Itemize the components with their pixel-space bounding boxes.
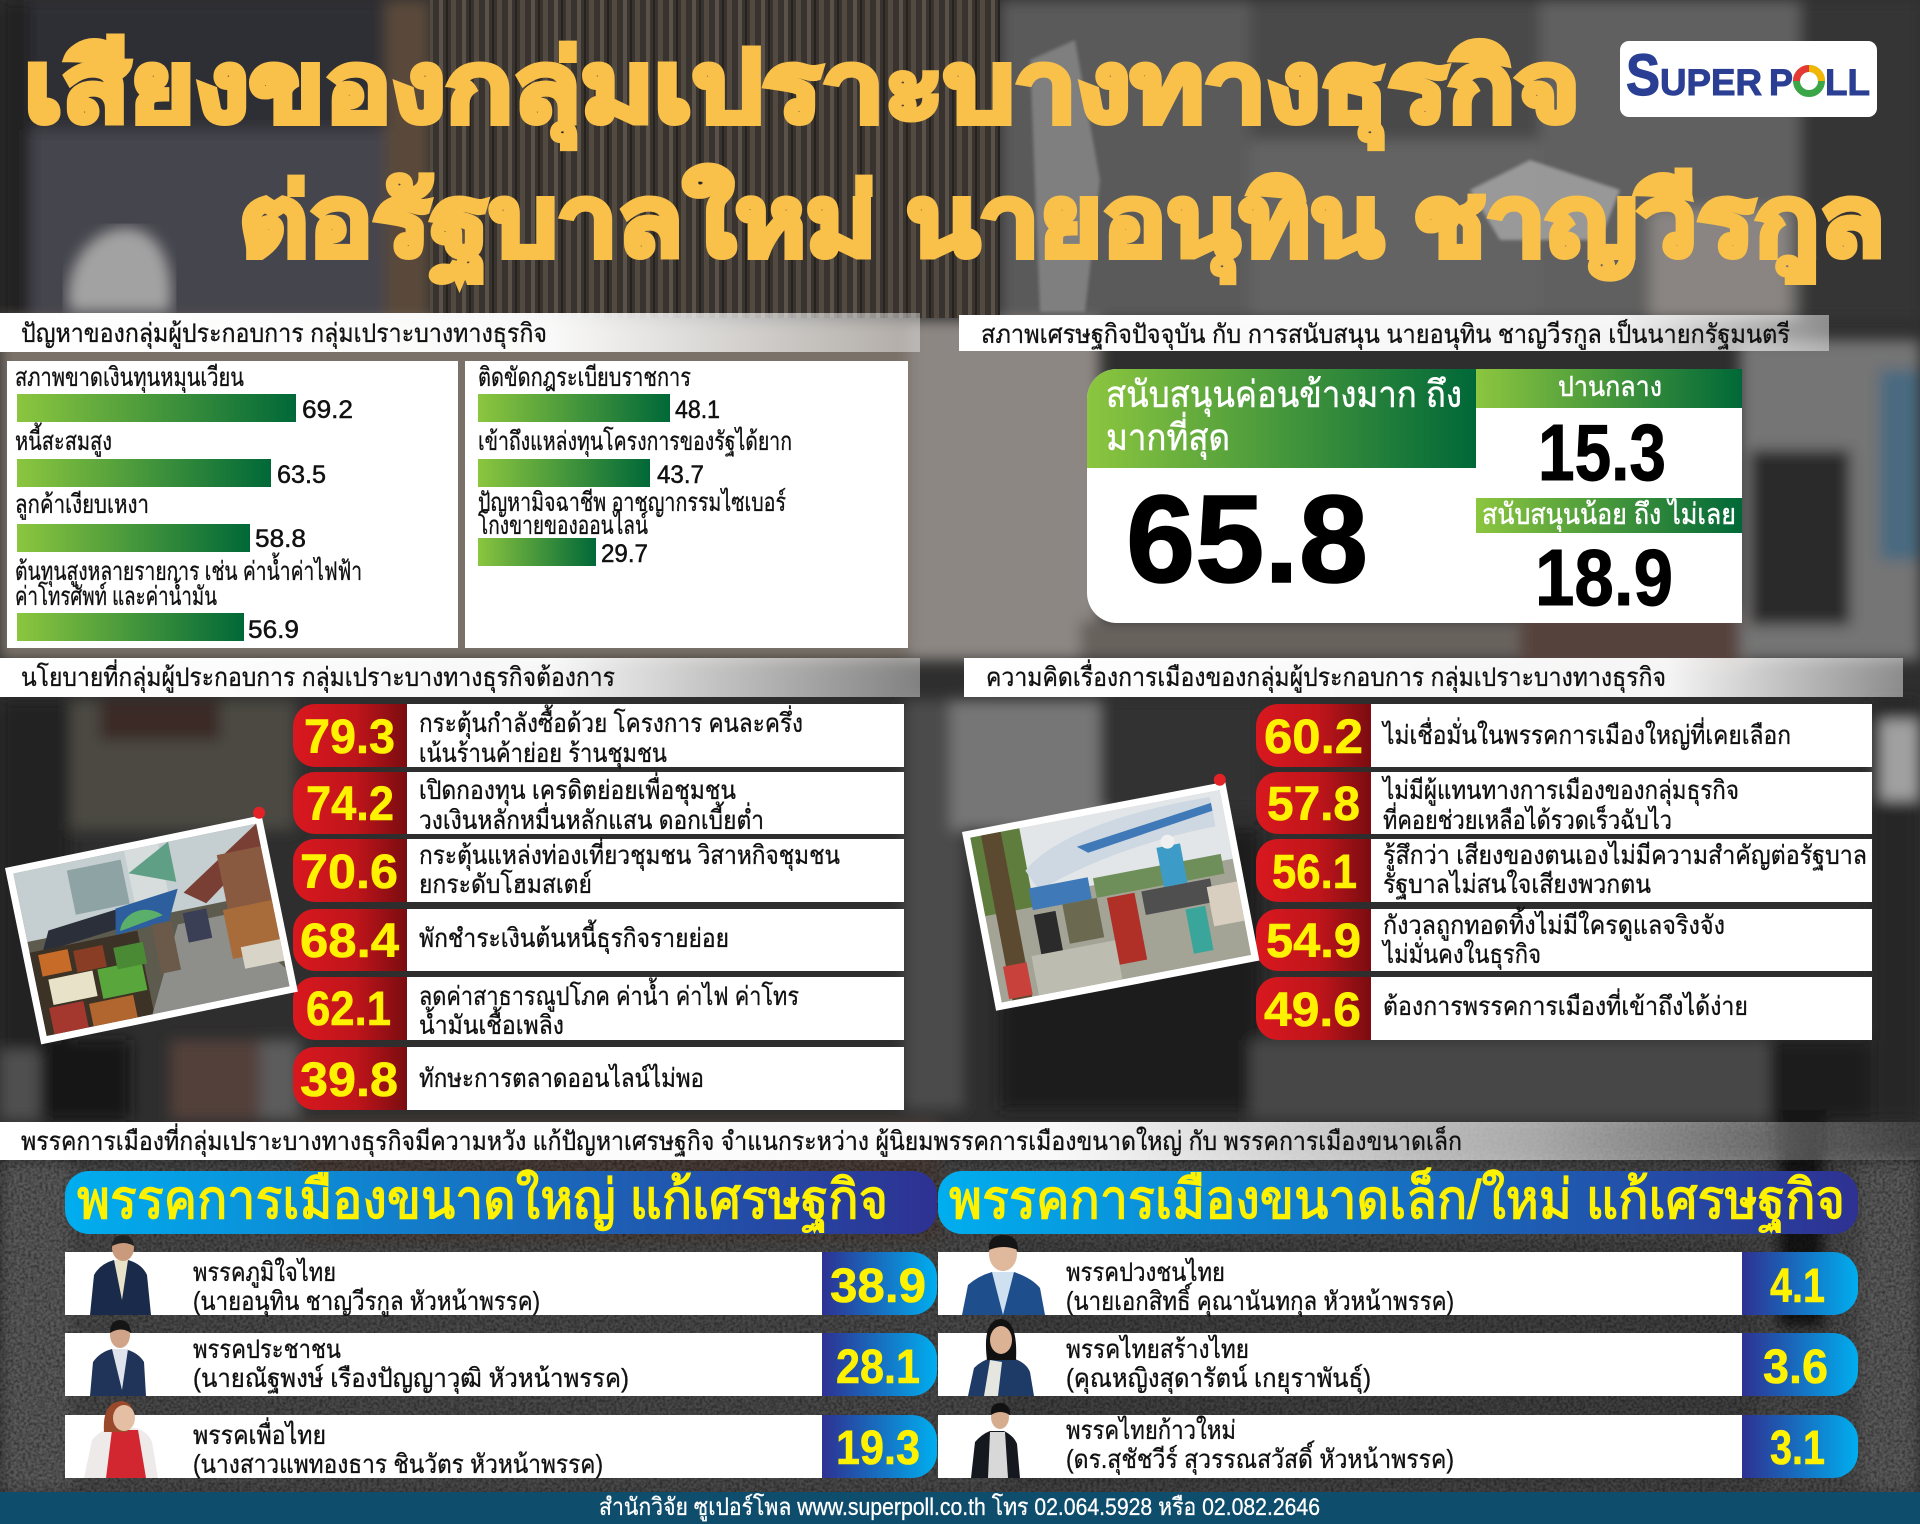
support high: 65.8: มากที่สุด	[1106, 411, 1230, 460]
title	[24, 32, 1885, 286]
portrait: Ekasit	[962, 1235, 1045, 1315]
policy row 68.4: พักชำระเงินต้นหนี้ธุรกิจรายย่อย	[419, 919, 729, 954]
support low: 18.9: สนับสนุนน้อย ถึง ไม่เลย	[1482, 497, 1736, 532]
photo: street food stall	[960, 773, 1260, 1011]
policy row 74.2: 74.2	[306, 778, 394, 831]
bar: high costs 56.9: ต้นทุนสูงหลายรายการ เช่น ค่าน้ำค่าไฟฟ้า	[15, 552, 362, 587]
policy row 62.1: ลดค่าสาธารณูปโภค ค่าน้ำ ค่าไฟ ค่าโทร	[419, 977, 799, 1012]
view row 54.9: ไม่มั่นคงในธุรกิจ	[1381, 936, 1541, 970]
view row 49.6	[1256, 977, 1872, 1040]
policy row 70.6	[293, 837, 904, 902]
title line 2: ต่อรัฐบาลใหม่ นายอนุทิน ชาญวีรกูล	[239, 166, 1885, 286]
bar: state funding access 43.7	[478, 426, 792, 489]
party row: Pheu Thai 19.3: (นางสาวแพทองธาร ชินวัตร หัวหน้าพรรค)	[193, 1449, 603, 1479]
party row: Thai Sang Thai 3.6: 3.6	[1763, 1341, 1828, 1394]
pin	[1213, 773, 1227, 787]
party row: Bhumjaithai 38.9: 38.9	[830, 1260, 926, 1313]
neutral: 15.3: ปานกลาง	[1558, 371, 1662, 402]
view row 56.1: 56.1	[1272, 846, 1357, 899]
logo: Super Poll: UPER	[1660, 62, 1762, 103]
bar: bureaucracy 48.1: ติดขัดกฎระเบียบราชการ	[478, 362, 691, 392]
political views list	[1256, 704, 1872, 1040]
portrait: Anutin	[90, 1235, 151, 1315]
policy row 70.6: กระตุ้นแหล่งท่องเที่ยวชุมชน วิสาหกิจชุมชน	[419, 837, 840, 871]
bar: bureaucracy 48.1	[478, 362, 720, 424]
logo: Super Poll	[1620, 41, 1877, 117]
heading: business problems: ปัญหาของกลุ่มผู้ประกอบการ กลุ่มเปราะบางทางธุรกิจ	[21, 318, 547, 349]
bar: cyber crime 29.7: ปัญหามิจฉาชีพ อาชญากรรมไซเบอร์	[478, 487, 786, 517]
policy row 74.2: เปิดกองทุน เครดิตย่อยเพื่อชุมชน	[419, 772, 736, 806]
party row: Pheu Thai 19.3: 19.3	[836, 1422, 920, 1475]
view row 56.1	[1256, 839, 1872, 902]
support low: 18.9: 18.9	[1535, 533, 1673, 622]
party row: Thai Sang Thai 3.6: พรรคไทยสร้างไทย	[1066, 1334, 1249, 1364]
bar: state funding access 43.7: 43.7	[657, 461, 704, 489]
view row 57.8	[1256, 772, 1872, 835]
heading: political views: ความคิดเรื่องการเมืองของกลุ่มผู้ประกอบการ กลุ่มเปราะบางทางธุรกิจ	[986, 659, 1666, 693]
photo: street market	[3, 806, 302, 1044]
view row 60.2: 60.2	[1264, 711, 1363, 764]
portrait: Sudarat	[968, 1319, 1034, 1396]
party row: Thai Ruam Palang 4.1: 4.1	[1770, 1260, 1825, 1313]
panel: support results	[1087, 369, 1742, 623]
policy row 62.1	[293, 977, 904, 1040]
support low: 18.9	[1476, 497, 1742, 622]
view row 49.6: 49.6	[1264, 984, 1361, 1037]
party row: Thai Kao Mai 3.1: (ดร.สุชัชวีร์ สุวรรณสวัสดิ์ หัวหน้าพรรค)	[1066, 1440, 1454, 1475]
party row: Thai Kao Mai 3.1: พรรคไทยก้าวใหม่	[1066, 1415, 1236, 1445]
policy row 70.6: 70.6	[300, 846, 398, 899]
view row 54.9: กังวลถูกทอดทิ้งไม่มีใครดูแลจริงจัง	[1383, 906, 1725, 941]
view row 56.1: รัฐบาลไม่สนใจเสียงพวกตน	[1383, 869, 1651, 900]
heading: business problems	[0, 313, 920, 352]
bar: cyber crime 29.7: 29.7	[601, 540, 648, 568]
bar: working capital 69.2: สภาพขาดเงินทุนหมุนเวียน	[15, 362, 244, 393]
policy row 74.2: วงเงินหลักหมื่นหลักแสน ดอกเบี้ยต่ำ	[419, 801, 764, 835]
banner: small and new parties: พรรคการเมืองขนาดเล็ก/ใหม่ แก้เศรษฐกิจ	[949, 1168, 1845, 1232]
bar: working capital 69.2: 69.2	[302, 396, 353, 424]
portrait: Paetongtarn	[84, 1401, 158, 1478]
party row: Thai Sang Thai 3.6: (คุณหญิงสุดารัตน์ เกยุราพันธุ์)	[1066, 1363, 1371, 1394]
heading: desired policies: นโยบายที่กลุ่มผู้ประกอบการ กลุ่มเปราะบางทางธุรกิจต้องการ	[21, 659, 615, 693]
logo: Super Poll: LL	[1825, 62, 1870, 103]
policy row 62.1: น้ำมันเชื้อเพลิง	[419, 1006, 564, 1040]
policy row 79.3: 79.3	[304, 711, 395, 764]
view row 60.2: ไม่เชื่อมั่นในพรรคการเมืองใหญ่ที่เคยเลือก	[1381, 717, 1791, 750]
bar: state funding access 43.7: เข้าถึงแหล่งทุนโครงการของรัฐได้ยาก	[478, 426, 792, 457]
party row: People's Party 28.1: (นายณัฐพงษ์ เรืองปัญญาวุฒิ หัวหน้าพรรค)	[193, 1363, 629, 1394]
pin	[252, 806, 266, 820]
party row: Bhumjaithai 38.9: (นายอนุทิน ชาญวีรกูล หัวหน้าพรรค)	[193, 1286, 540, 1317]
party row: Bhumjaithai 38.9: พรรคภูมิใจไทย	[193, 1257, 336, 1288]
party row: Pheu Thai 19.3: พรรคเพื่อไทย	[193, 1417, 326, 1450]
party row: Thai Ruam Palang 4.1: พรรคปวงชนไทย	[1066, 1257, 1225, 1287]
heading: party hopes: พรรคการเมืองที่กลุ่มเปราะบางทางธุรกิจมีความหวัง แก้ปัญหาเศรษฐกิจ จำแนกระหว่าง ผู้นิยมพรรคการเมืองขนาดใหญ่ กับ พรรคการเมืองขนาดเล็ก	[21, 1123, 1462, 1157]
policy row 39.8: 39.8	[300, 1054, 398, 1107]
party row: Thai Kao Mai 3.1	[938, 1403, 1858, 1478]
neutral: 15.3: 15.3	[1538, 408, 1666, 497]
portrait: Suchatvee	[971, 1403, 1020, 1478]
policy row 68.4	[293, 909, 904, 971]
support high: 65.8	[1087, 369, 1476, 609]
bar: accumulated debt 63.5	[15, 422, 326, 489]
party row: People's Party 28.1: 28.1	[836, 1341, 920, 1394]
bar: accumulated debt 63.5: 63.5	[277, 461, 326, 489]
panel: problems, right column	[465, 361, 908, 648]
view row 57.8: ที่คอยช่วยเหลือได้รวดเร็วฉับไว	[1383, 802, 1672, 835]
party row: Thai Ruam Palang 4.1: (นายเอกสิทธิ์ คุณานันทกุล หัวหน้าพรรค)	[1066, 1282, 1454, 1317]
footer: สำนักวิจัย ซูเปอร์โพล www.superpoll.co.th โทร 02.064.5928 หรือ 02.082.2646	[599, 1493, 1320, 1522]
logo: Super Poll: P	[1769, 62, 1793, 103]
party row: Thai Sang Thai 3.6	[938, 1319, 1858, 1396]
party row: People's Party 28.1: พรรคประชาชน	[193, 1334, 341, 1364]
bar: high costs 56.9: 56.9	[248, 616, 299, 644]
party row: People's Party 28.1	[65, 1320, 937, 1396]
support high: 65.8: 65.8	[1126, 471, 1368, 609]
bar: few customers 58.8: ลูกค้าเงียบเหงา	[15, 489, 149, 520]
heading: economy and support for Anutin: สภาพเศรษฐกิจปัจจุบัน กับ การสนับสนุน นายอนุทิน ชาญวีรกูล เป็นนายกรัฐมนตรี	[981, 318, 1790, 350]
policy row 79.3: กระตุ้นกำลังซื้อด้วย โครงการ คนละครึ่ง	[419, 704, 803, 739]
policy row 68.4: 68.4	[300, 915, 399, 968]
policy row 39.8	[293, 1047, 904, 1110]
bar: working capital 69.2	[15, 362, 353, 424]
party row: Thai Ruam Palang 4.1	[938, 1235, 1858, 1317]
neutral: 15.3	[1476, 369, 1742, 497]
title line 1: เสียงของกลุ่มเปราะบางทางธุรกิจ	[24, 32, 1580, 149]
panel: problems, left column	[7, 361, 458, 648]
bar: cyber crime 29.7	[478, 487, 786, 568]
view row 49.6: ต้องการพรรคการเมืองที่เข้าถึงได้ง่าย	[1383, 988, 1748, 1021]
portrait: Natthaphong	[90, 1320, 146, 1396]
bar: bureaucracy 48.1: 48.1	[675, 396, 720, 424]
bar: accumulated debt 63.5: หนี้สะสมสูง	[15, 422, 112, 457]
view row 56.1: รู้สึกว่า เสียงของตนเองไม่มีความสำคัญต่อรัฐบาล	[1383, 840, 1867, 871]
view row 60.2	[1256, 704, 1872, 767]
banner: large parties: พรรคการเมืองขนาดใหญ่ แก้เศรษฐกิจ	[77, 1169, 888, 1232]
policy row 79.3: เน้นร้านค้าย่อย ร้านชุมชน	[419, 738, 667, 769]
policy row 74.2	[293, 772, 904, 835]
policy row 39.8: ทักษะการตลาดออนไลน์ไม่พอ	[419, 1063, 704, 1093]
logo: Super Poll: S	[1626, 43, 1660, 108]
heading: desired policies	[0, 658, 920, 697]
bar: high costs 56.9	[15, 552, 362, 644]
heading: political views	[964, 658, 1903, 697]
policy list	[293, 704, 904, 1110]
policy row 79.3	[293, 704, 904, 769]
footer	[0, 1492, 1920, 1524]
view row 57.8: 57.8	[1267, 778, 1360, 831]
bar: few customers 58.8: 58.8	[255, 525, 306, 553]
bar: cyber crime 29.7: โกงขายของออนไลน์	[478, 510, 648, 540]
view row 54.9	[1256, 906, 1872, 971]
support high: 65.8: สนับสนุนค่อนข้างมาก ถึง	[1106, 374, 1462, 417]
heading: party hopes	[0, 1122, 1920, 1160]
party row: Thai Kao Mai 3.1: 3.1	[1770, 1422, 1825, 1475]
party row: Pheu Thai 19.3	[65, 1401, 937, 1479]
party row: Bhumjaithai 38.9	[65, 1235, 937, 1317]
bar: high costs 56.9: ค่าโทรศัพท์ และค่าน้ำมัน	[15, 577, 217, 611]
policy row 70.6: ยกระดับโฮมสเตย์	[419, 869, 592, 899]
view row 57.8: ไม่มีผู้แทนทางการเมืองของกลุ่มธุรกิจ	[1381, 775, 1739, 806]
bar: few customers 58.8	[15, 489, 306, 553]
view row 54.9: 54.9	[1266, 915, 1361, 968]
policy row 62.1: 62.1	[306, 983, 391, 1036]
